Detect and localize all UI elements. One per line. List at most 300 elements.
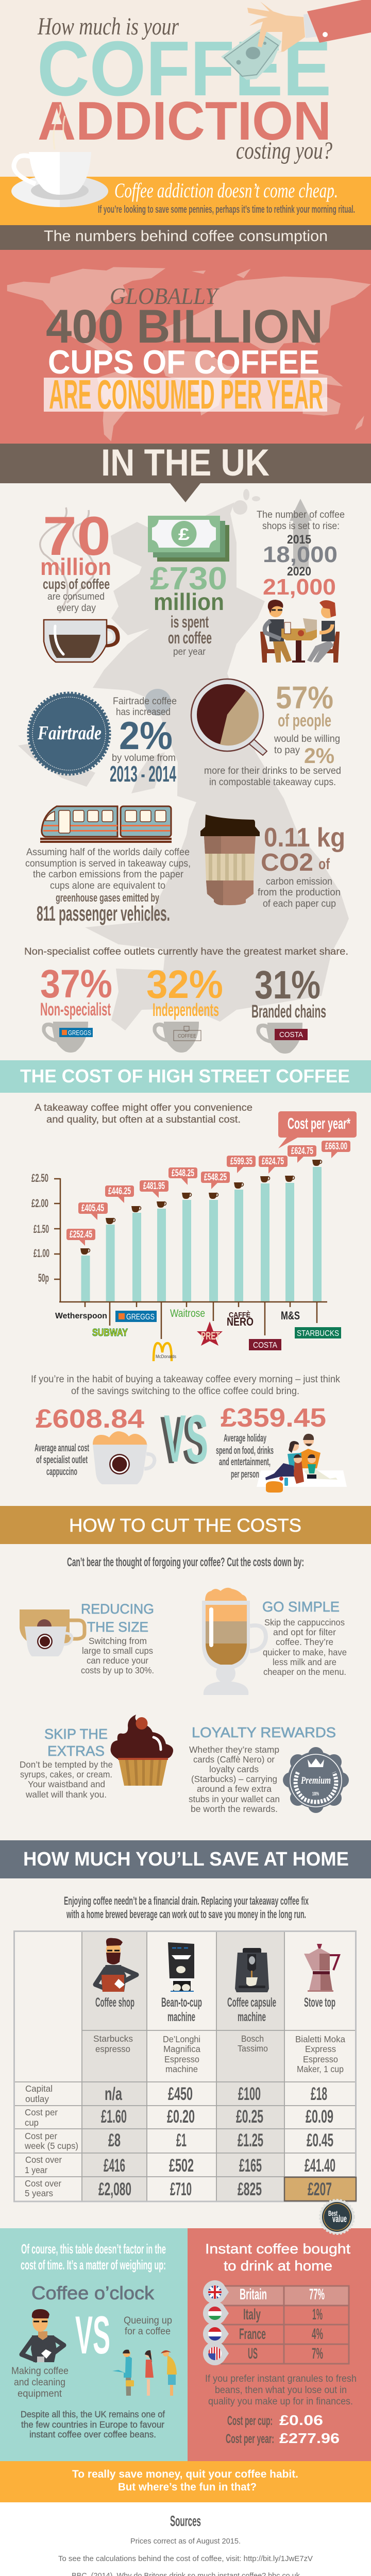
table model names: machine — [165, 2064, 198, 2074]
icons: cups on bars — [80, 1160, 322, 1255]
chart axes — [54, 1178, 327, 1339]
icon: barista — [95, 1938, 137, 1992]
icon: large and small cups — [20, 1609, 85, 1656]
table shading and grid — [14, 1931, 356, 2201]
icon: steam swirl — [40, 507, 94, 613]
icon: people queuing — [112, 2350, 177, 2396]
panel: loyalty rewards: (Starbucks) – carrying — [191, 1774, 277, 1784]
panel: go simple: coffee. They’re — [276, 1637, 333, 1647]
icon: two people at a cafe table — [260, 600, 340, 663]
label: queuing up — [124, 2315, 172, 2337]
panel: cost of time: VS — [75, 2306, 110, 2365]
brand logos — [55, 1308, 341, 1361]
text: takeaway intro: A takeaway coffee might offer you convenience — [35, 1103, 252, 1113]
stat: greenhouse gases: consumption is served in takeaway cups, — [25, 858, 191, 869]
heading: sources: Sources — [170, 2513, 201, 2530]
table values — [98, 2084, 335, 2199]
section heading: how to cut the costs: HOW TO CUT THE COSTS — [69, 1515, 301, 1536]
panel: go simple — [202, 1588, 347, 1695]
table values: £41.40 — [305, 2156, 335, 2176]
table values: £502 — [169, 2156, 194, 2176]
panel: go simple: cheaper on the menu. — [263, 1667, 346, 1677]
panel: loyalty rewards: Whether they’re stamp — [189, 1744, 279, 1755]
icon: capsule machine — [235, 1948, 269, 1992]
stat: fairtrade 2%: 2013 - 2014 — [110, 761, 176, 787]
chart axis labels: £2.00 — [31, 1197, 48, 1210]
stat: 0.11kg CO2: of — [318, 856, 330, 873]
icon: France flag pin — [203, 2324, 229, 2344]
panel: reducing the size: large to small cups — [82, 1646, 153, 1656]
table: instant coffee share — [221, 2286, 349, 2364]
icon: family picnic — [257, 1434, 347, 1493]
stat: branded chains 31% — [251, 963, 326, 1054]
heading: coffee o'clock: Coffee o’clock — [31, 2282, 155, 2303]
price bubbles: £252.45 — [70, 1229, 92, 1240]
icon: best value badge: Best — [328, 2209, 338, 2218]
text: table caveat: cost of time. It’s a matter of weighing up: — [21, 2257, 166, 2273]
stat: £730 million spent — [148, 516, 229, 657]
brand logos: M&S — [281, 1309, 300, 1322]
panel: cost of time — [0, 2228, 188, 2461]
panel: loyalty rewards: cards (Caffè Nero) or — [193, 1754, 275, 1765]
label: making coffee: Making coffee — [11, 2366, 69, 2377]
stat: 0.11kg CO2: CO2 — [261, 849, 313, 876]
chart axis labels: £2.50 — [31, 1172, 48, 1184]
logo: generic coffee — [174, 1026, 201, 1041]
table values: £0.25 — [236, 2107, 263, 2127]
stat: £730 million spent: is spent — [171, 613, 209, 631]
icon: coffee cup — [44, 620, 117, 662]
panel: reducing the size: can reduce your — [87, 1655, 148, 1666]
stat: 70 million cups: every day — [57, 603, 96, 614]
table values: £1.60 — [101, 2107, 127, 2127]
text: globally: GLOBALLY — [110, 283, 220, 309]
stat: instant cost: Cost per cup: — [227, 2414, 273, 2428]
text: takeaway intro — [35, 1103, 252, 1125]
label: annual cost — [35, 1443, 89, 1478]
logo: Costa — [275, 1029, 308, 1040]
panel: skip the extras: Your waistband and — [28, 1779, 105, 1789]
stat: greenhouse gases: the carbon emissions from the paper — [33, 869, 184, 880]
table row labels: 5 years — [25, 2188, 53, 2198]
table row labels: 1 year — [25, 2165, 47, 2175]
panel: closing message: But where’s the fun in that? — [118, 2481, 257, 2493]
table row labels: Cost per — [25, 2107, 58, 2117]
table values: £207 — [308, 2179, 332, 2199]
stat: instant cost — [226, 2412, 340, 2446]
stat: 0.11kg CO2: from the production — [258, 887, 341, 898]
text: instant granules note — [205, 2374, 357, 2407]
table: instant coffee share: 77% — [309, 2286, 325, 2303]
panel: loyalty rewards: loyalty cards — [209, 1764, 259, 1774]
stat: £730 million spent: on coffee — [168, 629, 212, 647]
panel: loyalty rewards: be worth the rewards. — [191, 1804, 278, 1814]
text: instant coffee note — [21, 2409, 165, 2439]
chart axis labels: £1.00 — [33, 1247, 49, 1260]
stat: non-specialist 37% — [40, 962, 112, 1053]
stat: 70 million cups: are consumed — [47, 591, 105, 602]
arrow: rising — [290, 499, 312, 568]
table values: £450 — [168, 2084, 193, 2104]
panel: go simple: less milk and are — [273, 1657, 336, 1667]
stat: instant cost: Cost per year: — [226, 2432, 274, 2446]
heading: instant coffee bought to drink at home: Instant coffee bought — [205, 2241, 351, 2257]
text: habit paragraph — [31, 1374, 340, 1397]
text: home brew intro — [64, 1894, 309, 1921]
background: UK map — [18, 489, 349, 1030]
chart axis labels: £1.50 — [33, 1223, 49, 1235]
panel: reducing the size: Switching from — [89, 1636, 147, 1646]
table row labels: week (5 cups) — [24, 2141, 78, 2151]
text: sources list — [32, 2537, 339, 2576]
label: annual cost: Average annual cost — [35, 1443, 89, 1454]
table column headings — [95, 1995, 335, 2024]
icon: hand holding money — [221, 0, 371, 80]
label: holiday spend: spend on food, drinks — [216, 1445, 274, 1456]
stat: 70 million cups: 70 — [43, 505, 111, 567]
icon: best value badge: value — [332, 2214, 347, 2225]
table row labels: Cost over — [25, 2155, 62, 2165]
stat: fairtrade 2%: Fairtrade coffee — [113, 696, 177, 707]
price bubbles: £599.35 — [230, 1156, 252, 1167]
panel: loyalty rewards: LOYALTY REWARDS — [192, 1724, 336, 1740]
section heading: the cost of high street coffee — [0, 1060, 371, 1093]
panel: header — [0, 0, 371, 177]
panel: skip the extras: EXTRAS — [47, 1743, 105, 1759]
table model names — [93, 2033, 345, 2074]
stat: branded chains 31%: 31% — [255, 963, 321, 1007]
label: annual cost: cappuccino — [46, 1466, 77, 1478]
label: making coffee: and cleaning — [14, 2377, 65, 2388]
comparison: coffee versus holiday spend: VS — [164, 1401, 208, 1476]
stat: 0.11kg CO2 — [200, 815, 345, 909]
stat: fairtrade 2%: 2% — [119, 714, 173, 758]
section heading: the numbers behind coffee consumption: The numbers behind coffee consumption — [44, 228, 328, 245]
table model names: Bialetti Moka — [295, 2034, 345, 2044]
panel: orange intro band — [0, 177, 371, 225]
heading: instant coffee bought to drink at home: to drink at home — [224, 2258, 332, 2274]
table model names: De’Longhi — [163, 2034, 200, 2044]
table model names: Magnifica — [163, 2044, 200, 2054]
price bubbles: £446.25 — [108, 1186, 131, 1197]
stat: independents 32%: Independents — [153, 1000, 219, 1020]
section heading: how much you'll save at home: HOW MUCH YOU’LL SAVE AT HOME — [23, 1849, 349, 1870]
panel: skip the extras: Don’t be tempted by the — [20, 1759, 113, 1770]
table: instant coffee share: US — [248, 2345, 258, 2362]
text: instant coffee note: Despite all this, the UK remains one of — [21, 2409, 165, 2419]
text: cups of coffee: CUPS OF COFFEE — [48, 343, 319, 381]
table model names: Maker, 1 cup — [297, 2064, 344, 2074]
stat: greenhouse gases — [25, 806, 191, 925]
text: sources list: Prices correct as of August 2015. — [130, 2537, 241, 2546]
chart axis labels: 50p — [38, 1272, 49, 1284]
stat: £730 million spent: million — [154, 588, 224, 615]
stat: holiday spend: £359.45 — [221, 1403, 326, 1432]
text: habit paragraph: If you’re in the habit of buying a takeaway coffee every morning – just think — [31, 1374, 340, 1385]
section heading: in the UK: IN THE UK — [101, 442, 269, 484]
stat: 57% of people: 2% — [304, 743, 334, 768]
brand logos: Wetherspoon — [55, 1312, 107, 1320]
stat: 70 million cups: cups of coffee — [43, 576, 110, 592]
stat: coffee shops rising: 21,000 — [263, 574, 336, 600]
stat: fairtrade 2%: by volume from — [112, 753, 176, 764]
table: instant coffee share: 1% — [312, 2306, 323, 2323]
section heading: the cost of high street coffee: THE COST OF HIGH STREET COFFEE — [20, 1065, 350, 1087]
table values: £710 — [170, 2179, 192, 2199]
icon: fairtrade badge: Fairtrade — [37, 722, 102, 744]
icon: banknotes — [148, 516, 229, 562]
table values: £18 — [311, 2084, 327, 2104]
icon: moka pot — [304, 1944, 339, 1992]
stat: annual cappuccino cost: £608.84 — [36, 1404, 145, 1433]
text: table caveat: Of course, this table doesn’t factor in the — [21, 2241, 166, 2257]
icon: premium badge: Premium — [300, 1775, 331, 1786]
stat: non-specialist 37%: Non-specialist — [40, 999, 111, 1020]
brand logos: PRET — [201, 1330, 220, 1342]
stat: coffee shops rising: 18,000 — [263, 542, 338, 567]
logo: Greggs — [59, 1028, 93, 1037]
panel: loyalty rewards — [189, 1724, 349, 1814]
price bubbles: £405.45 — [81, 1203, 104, 1214]
icon: white coffee cup and saucer — [11, 105, 108, 207]
panel: closing message: To really save money, quit your coffee habit. — [72, 2468, 298, 2480]
label: holiday spend: and entertainment, — [219, 1456, 271, 1468]
table row labels: Cost per — [25, 2131, 57, 2141]
stat: 0.11kg CO2: 0.11 kg — [264, 823, 345, 853]
stat: 57% of people: 57% — [276, 680, 333, 715]
table values: £100 — [238, 2084, 261, 2104]
panel: skip the extras: SKIP THE — [44, 1726, 108, 1742]
panel: reducing the size: THE SIZE — [87, 1619, 148, 1635]
brand logos: McDonalds — [156, 1354, 176, 1359]
icon: best value badge — [320, 2200, 354, 2234]
table values: £2,080 — [98, 2179, 131, 2199]
table: instant coffee share: Italy — [243, 2306, 261, 2323]
table values: £8 — [108, 2130, 121, 2150]
icon: filter coffee glass — [202, 1588, 266, 1695]
table model names: Starbucks — [93, 2033, 133, 2044]
label: queuing up: Queuing up — [124, 2315, 172, 2326]
label: making coffee — [11, 2366, 69, 2399]
table: home coffee savings — [14, 1931, 356, 2201]
table: instant coffee share: France — [239, 2326, 266, 2343]
table model names: Express — [305, 2044, 336, 2054]
brand logos: COSTA — [253, 1341, 277, 1350]
table values: £416 — [104, 2156, 125, 2176]
table: instant coffee share: 4% — [312, 2326, 323, 2343]
price bubbles: £624.75 — [262, 1156, 284, 1167]
icon: bean to cup machine — [168, 1942, 194, 1992]
stat: coffee shops rising: 2015 — [287, 533, 311, 547]
table column headings: Stove top — [304, 1995, 335, 2010]
table row labels: outlay — [25, 2094, 49, 2104]
heading: instant coffee bought to drink at home — [205, 2241, 351, 2274]
stat: £730 million spent: £730 — [150, 561, 227, 597]
title: COFFEE: COFFEE — [37, 25, 331, 112]
panel: reducing the size: REDUCING — [81, 1601, 154, 1617]
text: instant granules note: beans, then what you lose out in — [215, 2385, 347, 2396]
table column headings: machine — [238, 2010, 266, 2024]
comparison: coffee versus holiday spend — [35, 1401, 347, 1493]
section heading: the numbers behind coffee consumption — [0, 225, 371, 250]
table values: £0.09 — [306, 2107, 333, 2127]
table column headings: Coffee capsule — [227, 1995, 276, 2010]
text: VS — [160, 1401, 208, 1478]
stat: 70 million cups — [40, 505, 111, 614]
title: How much is your: How much is your — [37, 13, 179, 40]
panel: skip the extras: syrups, cakes, or cream. — [20, 1769, 112, 1780]
logo: generic coffee: COFFEE — [178, 1033, 196, 1039]
text: market share intro: Non-specialist coffee outlets currently have the greatest market share. — [24, 946, 348, 957]
table column headings: Coffee shop — [95, 1995, 134, 2010]
panel: global consumption — [0, 250, 371, 444]
stat: instant cost: £277.96 — [279, 2430, 340, 2446]
callout: cost per year — [278, 1111, 357, 1148]
icon: train — [40, 806, 172, 843]
stat: 57% of people: of people — [278, 711, 331, 731]
price bubbles: £663.00 — [325, 1141, 347, 1152]
brand logos: Waitrose — [170, 1308, 205, 1319]
label: holiday spend: Average holiday — [224, 1433, 266, 1444]
stat: 0.11kg CO2: carbon emission — [266, 876, 332, 887]
table values: n/a — [105, 2084, 122, 2104]
table values: £0.45 — [307, 2130, 333, 2150]
label: making coffee: equipment — [18, 2388, 62, 2399]
table values: £165 — [239, 2156, 262, 2176]
stat: 400 billion: 400 BILLION — [46, 300, 323, 353]
icon: man making coffee — [22, 2309, 64, 2362]
panel: reducing the size: costs by up to 30%. — [81, 1665, 154, 1675]
table row labels: cup — [25, 2117, 39, 2128]
icon: Britain flag pin — [203, 2280, 229, 2304]
section heading: how much you'll save at home — [0, 1840, 371, 1878]
table model names: Espresso — [303, 2054, 338, 2064]
stat: fairtrade 2% — [29, 689, 177, 787]
panel: instant coffee — [188, 2228, 371, 2461]
stat: coffee shops rising: 2020 — [287, 565, 311, 579]
stat: non-specialist 37%: 37% — [40, 962, 112, 1006]
price bubbles: £624.75 — [291, 1146, 313, 1157]
table column headings: Bean-to-cup — [161, 1995, 202, 2010]
world map — [7, 267, 371, 442]
title: ADDICTION: ADDICTION — [38, 91, 331, 151]
text: table caveat — [21, 2241, 166, 2273]
stat: 57% of people: more for their drinks to be served — [204, 766, 341, 776]
label: holiday spend: per person — [231, 1469, 259, 1480]
table row labels — [24, 2083, 78, 2198]
panel: go simple: quicker to make, have — [263, 1647, 347, 1657]
section heading: how to cut the costs — [0, 1506, 371, 1544]
brand logos: CAFFÈ — [229, 1311, 250, 1319]
stat: 57% of people — [191, 679, 341, 788]
panel: reducing the size — [20, 1601, 154, 1675]
brand logos: NERO — [227, 1315, 254, 1328]
table values: £1 — [176, 2130, 187, 2150]
stat: fairtrade 2%: has increased — [116, 707, 171, 718]
icon: banknotes: £ — [178, 525, 190, 544]
title: costing you?: costing you? — [236, 137, 332, 164]
label: annual cost: of specialist outlet — [36, 1454, 88, 1466]
panel: skip the extras — [20, 1715, 173, 1800]
stat: independents 32% — [146, 962, 223, 1053]
brand logos: GREGGS — [126, 1313, 155, 1321]
logo: Greggs: GREGGS — [68, 1029, 91, 1037]
text: instant granules note: quality you make up for in finances. — [208, 2396, 353, 2407]
panel: loyalty rewards: stubs in your wallet can — [189, 1794, 280, 1804]
price bubbles: £548.25 — [204, 1172, 227, 1183]
table row labels: Cost over — [25, 2178, 61, 2189]
section heading: in the UK — [0, 442, 371, 502]
stat: 0.11kg CO2: of each paper cup — [263, 899, 336, 909]
label: holiday spend — [216, 1433, 274, 1480]
brand logos: STARBUCKS — [297, 1329, 339, 1338]
bar chart: cost of high street coffee — [31, 1141, 350, 1361]
table column headings: machine — [167, 2010, 195, 2024]
chart axis labels — [31, 1172, 49, 1284]
table model names: Espresso — [164, 2054, 199, 2064]
panel: go simple: and opt for filter — [273, 1627, 336, 1637]
text: habit paragraph: of the savings switching to the office coffee could bring. — [71, 1386, 299, 1397]
price bubbles: £548.25 — [172, 1168, 194, 1179]
panel: loyalty rewards: around a few extra — [197, 1784, 272, 1794]
stat: 57% of people: in compostable takeaway cups. — [209, 777, 336, 788]
stat: 57% of people: to pay — [274, 745, 300, 756]
stat: 57% of people: would be willing — [274, 734, 340, 744]
stat: coffee shops rising — [257, 499, 345, 600]
table model names: espresso — [95, 2044, 130, 2054]
table values: £825 — [238, 2179, 262, 2199]
icon: takeaway cup — [200, 815, 260, 905]
brand logos: SUBWAY — [92, 1327, 128, 1338]
panel: skip the extras: wallet will thank you. — [25, 1789, 107, 1800]
icon: Italy flag pin — [203, 2303, 229, 2324]
text: instant granules note: If you prefer instant granules to fresh — [205, 2374, 357, 2384]
table model names: Tassimo — [238, 2043, 268, 2054]
stat: instant cost: £0.06 — [279, 2412, 323, 2428]
chart bars — [81, 1167, 322, 1302]
table values: £0.20 — [167, 2107, 195, 2127]
stat: greenhouse gases: greenhouse gases emitted by — [56, 891, 159, 904]
stat: independents 32%: 32% — [146, 962, 223, 1007]
panel: closing message — [0, 2461, 371, 2502]
text: takeaway intro: and quality, but often at a substantial cost. — [46, 1114, 241, 1125]
table row labels: Capital — [25, 2083, 53, 2094]
stat: coffee shops rising: shops is set to rise: — [262, 521, 340, 532]
stat: 70 million cups: million — [40, 553, 111, 580]
price bubbles: £481.95 — [143, 1181, 165, 1192]
stat: coffee shops rising: The number of coffee — [257, 510, 345, 520]
logo: Costa: COSTA — [279, 1030, 303, 1039]
table model names: Bosch — [241, 2033, 264, 2044]
icon: US flag pin — [203, 2342, 229, 2365]
stat: greenhouse gases: Assuming half of the worlds daily coffee — [26, 847, 190, 858]
icon: coffee cup seen from above — [191, 679, 267, 755]
label: queuing up: for a coffee — [125, 2326, 171, 2337]
text: VS: VS — [160, 1402, 205, 1478]
icon: cupcake — [111, 1715, 173, 1786]
stat: £730 million spent: per year — [173, 647, 206, 657]
panel: go simple: Skip the cappuccinos — [264, 1617, 345, 1628]
stat: greenhouse gases: cups alone are equivalent to — [50, 880, 165, 891]
text: instant coffee note: the few countries in Europe to favour — [21, 2419, 164, 2430]
icon: premium badge: 100% — [312, 1791, 319, 1797]
icon: cappuccino cup — [93, 1431, 155, 1484]
text: sources list: To see the calculations behind the cost of coffee, visit: http://bit.ly/1JwE7zV — [58, 2555, 313, 2563]
text: instant coffee note: instant coffee over coffee beans. — [29, 2429, 156, 2439]
table: instant coffee share: 7% — [312, 2345, 323, 2362]
icon: fairtrade badge — [29, 689, 171, 774]
panel: go simple: GO SIMPLE — [262, 1599, 340, 1615]
